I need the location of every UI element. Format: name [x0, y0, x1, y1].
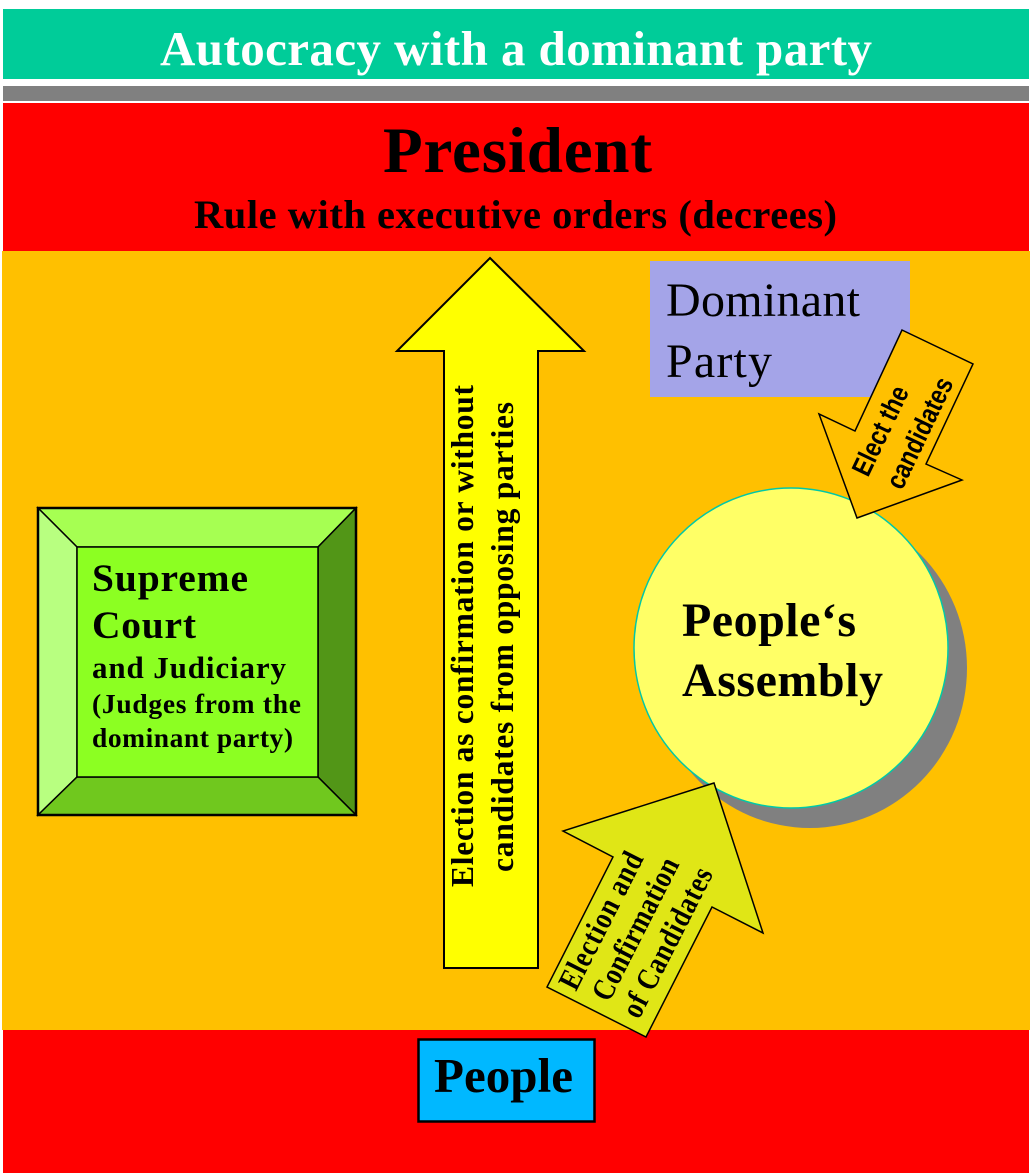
- panel: president: President: [383, 115, 652, 187]
- arrow: elect the candidates: [819, 330, 973, 518]
- box: dominant party: Party: [666, 335, 772, 388]
- box: dominant party: [650, 261, 910, 397]
- box: people: People: [434, 1048, 573, 1103]
- circle: people's assembly: People‘s: [682, 594, 856, 647]
- box: supreme court and judiciary: dominant party): [92, 722, 293, 753]
- arrow: election as confirmation: Election as confirmation or without: [445, 384, 480, 887]
- arrow: elect the candidates: Elect the: [846, 381, 915, 481]
- arrow: election and confirmation of candidates: Election and: [552, 846, 651, 995]
- circle: people's assembly: [634, 488, 967, 828]
- arrow: election and confirmation of candidates: of Candidates: [615, 862, 720, 1023]
- panel: president: [3, 103, 1029, 251]
- box: supreme court and judiciary: and Judiciary: [92, 650, 286, 685]
- grey divider band: [3, 86, 1029, 101]
- box: dominant party: Dominant: [666, 274, 861, 327]
- box: people: [418, 1040, 594, 1122]
- panel: orange state area: [2, 251, 1030, 1030]
- box: supreme court and judiciary: Court: [92, 603, 196, 647]
- box: supreme court and judiciary: (Judges from the: [92, 688, 301, 719]
- box: supreme court and judiciary: [38, 508, 356, 815]
- circle: people's assembly: Assembly: [682, 654, 883, 707]
- panel: people band: [3, 1030, 1029, 1173]
- title banner: Autocracy with a dominant party: [160, 21, 872, 76]
- arrow: election as confirmation: candidates from opposing parties: [485, 402, 520, 872]
- arrow: election and confirmation of candidates: [547, 783, 763, 1037]
- arrow: elect the candidates: candidates: [880, 372, 960, 494]
- panel: president: Rule with executive orders (decrees): [194, 192, 837, 237]
- arrow: election and confirmation of candidates: Confirmation: [585, 852, 687, 1006]
- arrow: election as confirmation: [397, 258, 584, 968]
- title banner: [3, 9, 1029, 79]
- box: supreme court and judiciary: Supreme: [92, 556, 248, 600]
